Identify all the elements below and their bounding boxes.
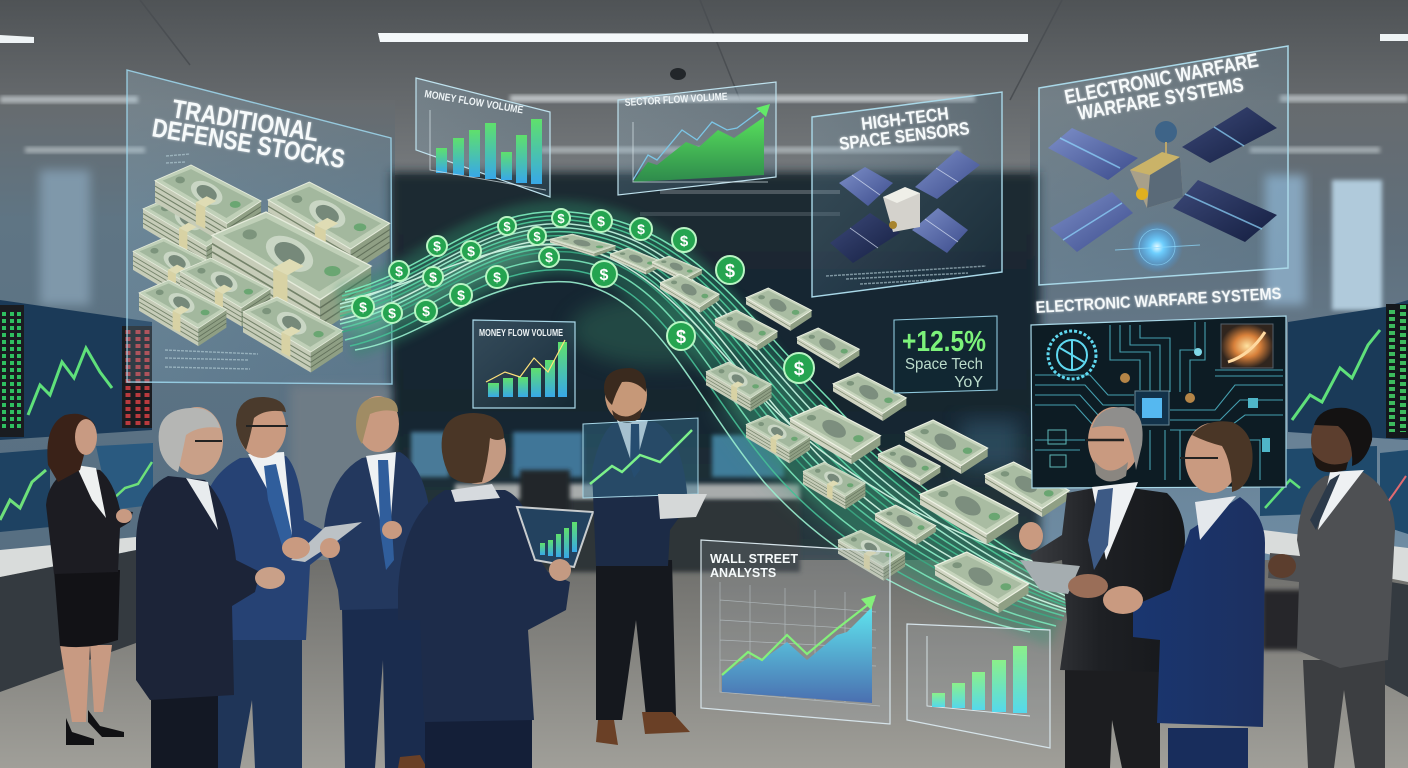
- dollar coins: $: [457, 287, 465, 303]
- dollar coins: $: [725, 261, 735, 281]
- heading: WARFARE SYSTEMS: [1076, 74, 1245, 125]
- dollar coins: $: [600, 267, 609, 284]
- panel: electronic warfare satellite: [1039, 46, 1288, 285]
- bars: [488, 342, 567, 397]
- ceiling lights: [0, 33, 1408, 216]
- heading: SECTOR FLOW VOLUME: [624, 91, 728, 109]
- heading: [710, 552, 798, 580]
- fine print: [826, 266, 986, 284]
- holographic chart in hand: [583, 418, 698, 498]
- satellite: [1048, 107, 1277, 252]
- dollar coins: $: [794, 359, 805, 380]
- board details: [1048, 348, 1270, 467]
- monitor wall right: [1260, 300, 1408, 582]
- person: bearded man, charcoal suit: [1019, 407, 1185, 768]
- dollar coins: $: [557, 211, 565, 226]
- chart: wall street analysts: [701, 540, 890, 724]
- bars: [932, 646, 1027, 713]
- area: [633, 117, 764, 182]
- heading: ELECTRONIC WARFARE: [1063, 50, 1260, 109]
- heading: SPACE SENSORS: [838, 118, 971, 154]
- panel: circuit board: [1031, 316, 1286, 488]
- monitor: upper left trading screen: [0, 300, 152, 440]
- heading: WALL STREET: [710, 552, 798, 566]
- heading: HIGH-TECH: [860, 103, 950, 134]
- heading: traditional defense stocks: TRADITIONAL: [170, 93, 321, 147]
- person: central presenter: [583, 368, 707, 745]
- person: silver-haired man: [136, 407, 285, 768]
- heading: ANALYSTS: [710, 566, 776, 580]
- satellite: [830, 150, 980, 263]
- callout: +12.5% space tech yoy: +12.5%: [902, 326, 986, 358]
- person: man in grey suit, far right: [1268, 408, 1395, 768]
- desk left: [0, 537, 136, 577]
- grid: [720, 582, 880, 706]
- arrow: [756, 104, 770, 117]
- heading: traditional defense stocks: [150, 93, 347, 174]
- dollar coins: $: [433, 238, 441, 254]
- dollar coins: $: [429, 269, 437, 285]
- heading: MONEY FLOW VOLUME: [424, 88, 524, 116]
- circuit traces: [1035, 322, 1283, 480]
- person: man in navy suit: [323, 396, 433, 768]
- fire screen: [1221, 324, 1273, 368]
- panel: high-tech space sensors: [812, 92, 1002, 297]
- dollar coins: $: [467, 243, 475, 259]
- person: man in blue suit with tablet: [203, 397, 362, 768]
- monitor: lower right trading screens: [1260, 446, 1408, 534]
- dollar coins: $: [597, 213, 605, 229]
- flying banknote stacks: [550, 234, 1069, 613]
- fine print: [165, 154, 258, 369]
- panel: traditional defense stocks: [127, 70, 392, 384]
- dollar coins: $: [503, 219, 511, 234]
- chart: money flow volume mini panel: [473, 320, 575, 408]
- monitor wall left: [0, 300, 153, 577]
- chart: sector flow volume: [618, 82, 776, 195]
- monitor: lower left trading screens: [0, 443, 153, 532]
- heading: [838, 103, 971, 154]
- dollar coins: $: [359, 299, 367, 315]
- dollar coins: $: [395, 263, 403, 279]
- callout: +12.5% space tech yoy: [894, 316, 997, 393]
- dollar coins: $: [533, 229, 541, 244]
- flow lines: [340, 211, 1066, 632]
- hand: [549, 559, 571, 581]
- dollar coins: [352, 209, 814, 383]
- central chip: [1135, 391, 1169, 425]
- heading: MONEY FLOW VOLUME: [479, 328, 563, 339]
- heading: [1063, 50, 1260, 125]
- dollar coins: $: [637, 221, 645, 237]
- dollar coins: $: [676, 327, 686, 347]
- scanner ring: [1048, 331, 1096, 379]
- callout: +12.5% space tech yoy: Space Tech: [905, 356, 983, 373]
- desk right: [1263, 530, 1408, 582]
- tablet: [291, 522, 362, 562]
- bars: [436, 119, 542, 184]
- tablet: [658, 494, 707, 519]
- chart: small bar panel: [907, 624, 1050, 748]
- tablet: [1020, 560, 1080, 594]
- signal glow: [1115, 221, 1200, 273]
- person: man in blue suit, right: [1103, 421, 1265, 768]
- person: man seen from behind: [398, 413, 570, 768]
- callout: +12.5% space tech yoy: YoY: [954, 374, 983, 391]
- area: [722, 607, 872, 703]
- arrow: [861, 595, 876, 610]
- chart: money flow volume bars: [416, 78, 550, 197]
- cash stacks: [133, 165, 390, 373]
- tablet with bar chart: [517, 507, 593, 581]
- dollar coins: $: [493, 269, 501, 285]
- dollar coins: $: [422, 303, 430, 319]
- heading: traditional defense stocks: DEFENSE STOCKS: [150, 112, 347, 174]
- dollar coins: $: [545, 249, 553, 265]
- person: woman analyst: [46, 414, 133, 745]
- money flow stream: [340, 211, 1066, 632]
- dollar coins: $: [388, 305, 396, 321]
- monitor: upper right trading screen: [1288, 300, 1408, 440]
- dollar coins: $: [680, 233, 689, 250]
- heading: electronic warfare systems: ELECTRONIC WARFARE SYSTEMS: [1035, 285, 1282, 317]
